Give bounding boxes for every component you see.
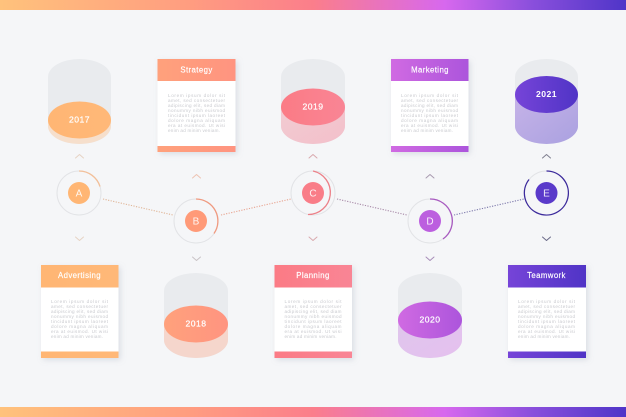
chevron: up B xyxy=(192,174,200,178)
connector: dotted line B to C xyxy=(221,199,291,215)
card: Advertising: Advertising xyxy=(58,271,101,280)
card text: Teamwork: era at euismod. Ut wisi xyxy=(518,329,575,334)
node E: E xyxy=(543,188,550,200)
top gradient bar xyxy=(0,0,626,10)
card text: Advertising: adipiscing elit, sed diam xyxy=(51,309,108,314)
card text: Strategy xyxy=(168,93,226,133)
card text: Strategy: nonummy nibh euismod xyxy=(168,108,225,113)
card text: Planning: tincidunt ipsum laoreet xyxy=(284,319,342,324)
chevron: up C xyxy=(309,154,317,158)
card: Planning xyxy=(274,265,352,358)
card text: Planning: era at euismod. Ut wisi xyxy=(284,329,342,334)
chevron: down A xyxy=(76,237,84,240)
card: Advertising xyxy=(41,265,118,358)
card text: Marketing: dolore magna aliquam xyxy=(401,118,458,123)
card text: Planning: amet, sed consectetuer xyxy=(284,304,342,309)
cylinder: 2021: 2021 xyxy=(536,89,557,99)
card text: Advertising: tincidunt ipsum laoreet xyxy=(51,319,109,324)
card text: Planning: Lorem ipsum dolor sit xyxy=(284,299,342,304)
card text: Advertising: dolore magna aliquam xyxy=(51,324,108,329)
cylinder: 2018 xyxy=(164,273,228,358)
card text: Advertising: amet, sed consectetuer xyxy=(51,304,108,309)
card text: Strategy: Lorem ipsum dolor sit xyxy=(168,93,226,98)
card text: Marketing: adipiscing elit, sed diam xyxy=(401,103,458,108)
card text: Teamwork: Lorem ipsum dolor sit xyxy=(518,299,576,304)
chevron: down B xyxy=(192,257,200,260)
card text: Strategy: amet, sed consectetuer xyxy=(168,98,225,103)
chevron: down C xyxy=(309,237,317,240)
card text: Marketing: tincidunt ipsum laoreet xyxy=(401,113,459,118)
node D xyxy=(408,199,452,243)
card: Strategy: Strategy xyxy=(180,66,213,74)
card: Strategy xyxy=(158,59,236,152)
connector: dotted line A to B xyxy=(103,199,173,215)
card: Teamwork: Teamwork xyxy=(527,271,566,280)
cylinder: 2021 xyxy=(515,59,578,144)
card text: Planning: adipiscing elit, sed diam xyxy=(284,309,342,314)
card text: Teamwork: adipiscing elit, sed diam xyxy=(518,309,575,314)
card text: Strategy: dolore magna aliquam xyxy=(168,118,225,123)
node C: C xyxy=(309,188,317,200)
node A xyxy=(57,171,101,215)
card text: Marketing: Lorem ipsum dolor sit xyxy=(401,93,459,98)
bottom gradient bar xyxy=(0,407,626,417)
card text: Teamwork: nonummy nibh euismod xyxy=(518,314,575,319)
connector: dotted line C to D xyxy=(337,199,407,215)
cylinder: 2017: 2017 xyxy=(69,114,90,124)
card text: Planning: dolore magna aliquam xyxy=(284,324,342,329)
card: Marketing: Marketing xyxy=(411,66,449,74)
node B: B xyxy=(193,216,200,228)
card text: Planning xyxy=(284,299,342,339)
card text: Teamwork xyxy=(518,299,576,339)
chevron: up D xyxy=(426,174,434,178)
chevron: up A xyxy=(76,154,84,158)
cylinder: 2020 xyxy=(398,273,462,358)
card text: Marketing xyxy=(401,93,459,133)
card text: Teamwork: dolore magna aliquam xyxy=(518,324,575,329)
node B xyxy=(174,199,218,243)
node D: D xyxy=(426,216,434,228)
card text: Advertising: enim ad minim veniam. xyxy=(51,334,103,339)
card text: Strategy: adipiscing elit, sed diam xyxy=(168,103,225,108)
card text: Teamwork: enim ad minim veniam. xyxy=(518,334,570,339)
chevron: down E xyxy=(542,237,550,240)
chevron: up E xyxy=(542,154,550,158)
card text: Strategy: era at euismod. Ut wisi xyxy=(168,123,225,128)
chevron: down D xyxy=(426,257,434,260)
card: Planning: Planning xyxy=(296,271,330,280)
connector: dotted line D to E xyxy=(454,199,524,215)
card text: Marketing: amet, sed consectetuer xyxy=(401,98,458,103)
card text: Advertising xyxy=(51,299,109,339)
card text: Advertising: nonummy nibh euismod xyxy=(51,314,108,319)
card text: Marketing: nonummy nibh euismod xyxy=(401,108,458,113)
cylinder: 2019: 2019 xyxy=(302,102,324,112)
card text: Advertising: Lorem ipsum dolor sit xyxy=(51,299,109,304)
cylinder: 2020: 2020 xyxy=(419,314,441,324)
card text: Advertising: era at euismod. Ut wisi xyxy=(51,329,108,334)
card text: Planning: nonummy nibh euismod xyxy=(284,314,342,319)
cylinder: 2018: 2018 xyxy=(185,318,207,328)
card text: Strategy: tincidunt ipsum laoreet xyxy=(168,113,226,118)
card text: Planning: enim ad minim veniam. xyxy=(284,334,336,339)
card: Marketing xyxy=(391,59,468,152)
cylinder: 2019 xyxy=(281,59,345,144)
cylinder: 2017 xyxy=(48,59,111,144)
card text: Marketing: enim ad minim veniam. xyxy=(401,128,453,133)
card: Teamwork xyxy=(508,265,586,358)
card text: Teamwork: amet, sed consectetuer xyxy=(518,304,575,309)
node C xyxy=(291,171,335,215)
card text: Strategy: enim ad minim veniam. xyxy=(168,128,220,133)
card text: Teamwork: tincidunt ipsum laoreet xyxy=(518,319,576,324)
node A: A xyxy=(76,188,83,200)
node E xyxy=(524,171,568,215)
card text: Marketing: era at euismod. Ut wisi xyxy=(401,123,458,128)
